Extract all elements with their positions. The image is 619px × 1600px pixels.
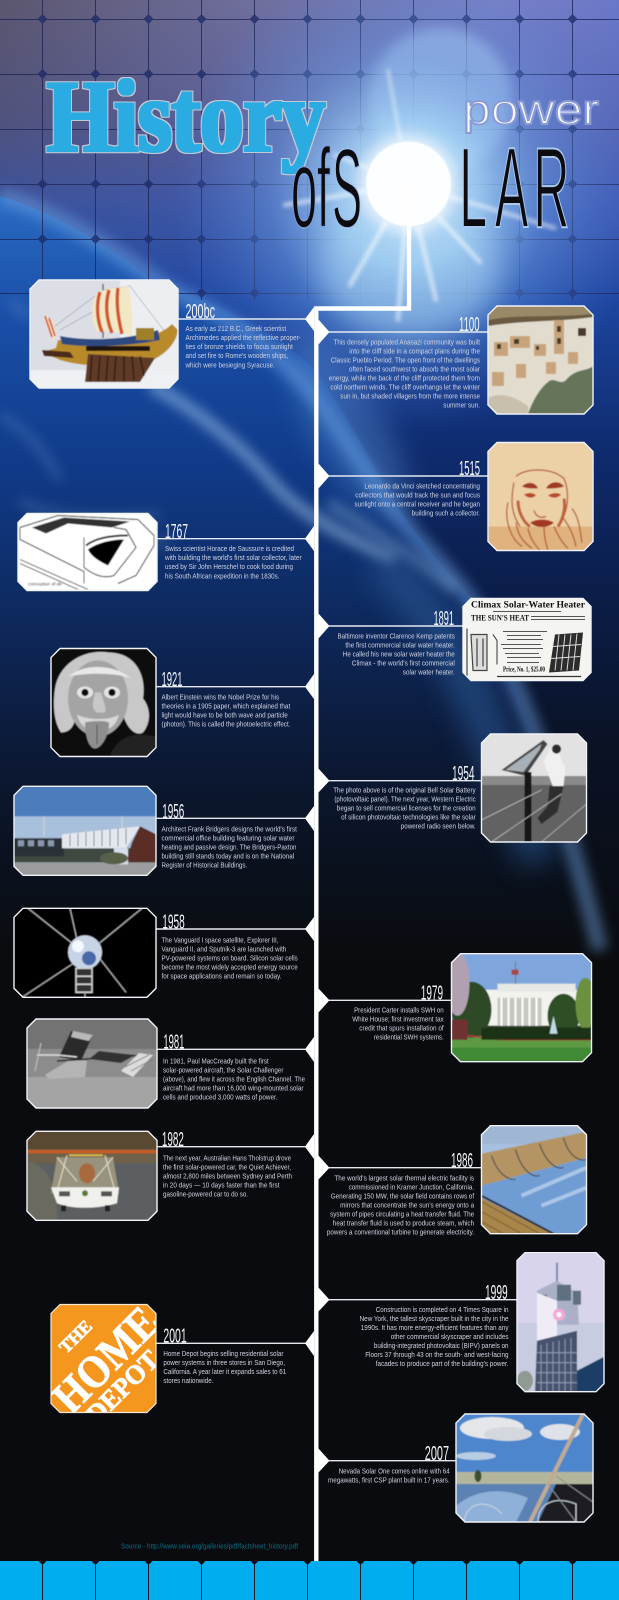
entry: 1986: 1986	[451, 1149, 473, 1172]
background grid of solar panel cells	[0, 0, 619, 300]
description: building such a collector.	[412, 508, 480, 517]
description	[185, 324, 301, 369]
description: powers a conventional turbine to generate electricity.	[327, 1227, 474, 1236]
description: ties of bronze shields to focus sunlight	[186, 342, 294, 351]
description: used by Sir John Herschel to cook food during	[165, 562, 293, 571]
description: As early as 212 B.C., Greek scientist	[186, 324, 287, 333]
description: Register of Historical Buildings.	[162, 861, 247, 870]
title: History of Solar power: S	[332, 126, 362, 251]
description: Architect Frank Bridgers designs the world's first	[162, 825, 298, 834]
description: Albert Einstein wins the Nobel Prize for his	[162, 692, 279, 701]
description	[328, 1466, 450, 1484]
photo: climax solar water heater ad: Climax Solar-Water Heater	[471, 600, 586, 610]
description: (above), and flew it across the English Channel. The	[163, 1074, 305, 1083]
connector	[318, 768, 481, 793]
description: into the cliff side in a compact plans during the	[349, 347, 480, 356]
description	[352, 1006, 444, 1042]
title word: power: power	[463, 86, 599, 134]
description: Leonardo da Vinci sketched concentrating	[364, 481, 480, 490]
connector	[318, 1155, 481, 1180]
connector	[318, 988, 451, 1013]
description: credit that spurs installation of	[359, 1024, 444, 1033]
description	[360, 1305, 509, 1368]
description: residential SWH systems.	[374, 1033, 444, 1042]
entry: 1956: 1956	[162, 800, 184, 823]
photo: home depot logo: DEPOT	[80, 1344, 165, 1429]
description	[164, 544, 302, 580]
photo: white house	[446, 952, 596, 1062]
photo: home depot logo: THE	[55, 1316, 96, 1357]
year: 1767	[165, 520, 188, 543]
entry: 1982: 1982	[162, 1128, 184, 1151]
photo: 4 times square	[517, 1253, 604, 1392]
description: become the most widely accepted energy source	[162, 962, 298, 971]
photo: greek ship	[30, 280, 178, 388]
description: The next year, Australian Hans Tholstrup drove	[163, 1154, 291, 1163]
entry: 1958: 1958	[162, 910, 185, 933]
description: cells and produced 3,000 watts of power.	[163, 1092, 278, 1101]
connector	[156, 674, 314, 699]
description: He called his new solar water heater the	[343, 650, 455, 659]
title word: LAR: LAR	[459, 123, 569, 252]
description: This densely populated Anasazi community was built	[334, 338, 481, 347]
title: History of Solar power: of	[291, 126, 330, 251]
connector	[318, 1287, 517, 1312]
description: The photo above is of the original Bell Solar Battery	[333, 786, 476, 795]
entry: 1954	[318, 734, 586, 842]
description: the first commercial solar water heater.	[345, 641, 455, 650]
description	[163, 1154, 292, 1199]
description: Vanguard II, and Sputnik-3 are launched with	[162, 944, 286, 953]
description: 1990s. It has more energy-efficient features than any	[361, 1323, 509, 1332]
description: sunlight onto a central receiver and he began	[354, 499, 480, 508]
photo: solar collector sketch	[18, 514, 157, 590]
entry: 1981: 1981	[163, 1031, 184, 1054]
entry: 1100: 1100	[459, 313, 480, 336]
entry: 1979	[318, 952, 596, 1062]
entry: 1767	[18, 514, 314, 590]
entry: 1986	[318, 1126, 586, 1236]
description: cold northern winds. The cliff overhangs let the winter	[330, 383, 480, 392]
description: Nevada Solar One comes online with 64	[339, 1466, 450, 1475]
entry: 1515	[318, 442, 593, 550]
description	[329, 338, 481, 410]
entry: 2007	[318, 1414, 593, 1522]
photo: cliff dwellings	[488, 306, 593, 414]
photo: bell solar battery	[482, 734, 586, 842]
photo: climax solar water heater ad: THE SUN'S HEAT	[471, 614, 530, 622]
description	[162, 935, 298, 980]
description: Archimedes applied the reflective proper-	[186, 333, 301, 342]
description: building still stands today and is on the National	[162, 852, 294, 861]
photo: home depot logo	[50, 1304, 157, 1414]
description: summer sun.	[443, 401, 480, 410]
photo: einstein	[51, 648, 156, 756]
title: History of Solar power	[47, 59, 599, 252]
description: The world's largest solar thermal electric facility is	[334, 1173, 474, 1182]
photo: vanguard satellite	[14, 908, 156, 997]
description: California. A year later it expands sales to 61	[163, 1367, 286, 1376]
connector	[318, 319, 488, 345]
photo: kramer junction mirrors	[482, 1126, 586, 1234]
description: his South African expedition in the 1830s.	[165, 571, 280, 580]
photo: climax solar water heater ad	[463, 598, 591, 680]
entry: 1979: 1979	[421, 982, 443, 1005]
entry: 2001	[50, 1304, 314, 1414]
connector	[318, 463, 488, 489]
description: for space applications and remain so today.	[162, 971, 282, 980]
description: President Carter installs SWH on	[354, 1006, 444, 1015]
description: New York, the tallest skyscraper built in the city in the	[360, 1314, 508, 1323]
description: Classic Pueblo Period. The open front of the dwellings	[331, 356, 480, 365]
timeline spine	[316, 184, 409, 1562]
description: power systems in three stores in San Diego,	[163, 1358, 285, 1367]
bottom blue solar cell band	[0, 1561, 619, 1600]
photo: bridgers paxton building	[14, 786, 156, 875]
description: energy, while the back of the cliff protected them from	[329, 374, 480, 383]
entry: 1982	[27, 1128, 314, 1220]
description: Generating 150 MW, the solar field contains rows of	[331, 1191, 475, 1200]
year: 2001	[163, 1325, 187, 1348]
description: Swiss scientist Horace de Saussure is credited	[165, 544, 294, 553]
description: megawatts, first CSP plant built in 17 years.	[328, 1475, 450, 1484]
description: often faced southwest to absorb the most solar	[349, 365, 480, 374]
photo: solar challenger aircraft	[27, 1019, 157, 1108]
connector	[318, 613, 463, 639]
description: sun in, but shaded villagers from the more intense	[340, 392, 480, 401]
entry: 1999: 1999	[485, 1281, 508, 1304]
description: solar water heater.	[403, 668, 455, 677]
description: (photovoltaic panel). The next year, Western Electric	[334, 795, 476, 804]
entry: 1891: 1891	[434, 607, 454, 630]
entry: 1999	[318, 1253, 604, 1392]
entry: 1515: 1515	[459, 457, 480, 480]
connector	[156, 917, 314, 941]
description: Floors 37 through 43 on the south- and west-facing	[365, 1350, 508, 1359]
entry: 1891	[318, 598, 591, 680]
description: the first solar-powered car, the Quiet Achiever,	[163, 1163, 291, 1172]
description	[333, 786, 476, 831]
description: heating and passive design. The Bridgers-Paxton	[162, 843, 296, 852]
entry: 1921	[51, 648, 314, 756]
description	[354, 481, 480, 517]
connector	[156, 1134, 314, 1159]
description: commercial office building featuring solar water	[162, 834, 295, 843]
description: almost 2,800 miles between Sydney and Perth	[163, 1172, 292, 1181]
description: commissioned in Kramer Junction, California.	[349, 1182, 474, 1191]
connector	[156, 806, 314, 831]
description: powered radio seen below.	[401, 822, 476, 831]
connector	[156, 1331, 314, 1356]
description: The Vanguard I space satellite, Explorer III,	[162, 935, 278, 944]
description: and set fire to Rome's wooden ships,	[186, 351, 288, 360]
photo: climax solar water heater ad: Price, No. 1, $25.00	[503, 666, 545, 674]
description: collectors that would track the sun and focus	[355, 490, 480, 499]
entry: 1954: 1954	[452, 762, 474, 785]
description	[338, 632, 455, 677]
description: other commercial skyscraper and includes	[391, 1332, 509, 1341]
description: heat transfer fluid is used to produce steam, which	[333, 1218, 474, 1227]
photo: solar collector sketch: conception of de	[28, 582, 62, 586]
description: of silicon photovoltaic technologies like the solar	[341, 813, 476, 822]
icon: sun with rays	[173, 0, 619, 430]
entry: 1981	[27, 1019, 314, 1108]
description	[163, 1349, 286, 1385]
description: system of pipes circulating a heat transfer fluid. The	[330, 1209, 474, 1218]
entry: 200bc	[30, 280, 314, 388]
description: PV-powered systems on board. Silicon solar cells	[162, 953, 298, 962]
description: (photon). This is called the photoelectric effect.	[162, 719, 290, 728]
description: Construction is completed on 4 Times Square in	[376, 1305, 508, 1314]
photo: home depot logo: HOME	[42, 1296, 169, 1423]
photo: quiet achiever solar car	[27, 1131, 157, 1220]
description: began to sell commercial licenses for the creation	[337, 804, 476, 813]
description: facades to produce part of the building's power.	[376, 1359, 508, 1368]
description	[163, 1056, 305, 1101]
description: with building the world's first solar collector, later	[164, 553, 302, 562]
description: Home Depot begins selling residential solar	[163, 1349, 284, 1358]
photo: nevada solar one	[456, 1414, 593, 1522]
description: gasoline-powered car to do so.	[163, 1190, 248, 1199]
description: stores nationwide.	[163, 1376, 213, 1385]
entry: 1956	[14, 786, 314, 875]
entry: 1100	[318, 306, 593, 414]
description: light would have to be both wave and particle	[162, 710, 288, 719]
description: theories in a 1905 paper, which explained that	[162, 701, 291, 710]
description	[327, 1173, 475, 1236]
description	[162, 692, 291, 728]
entry: 1921: 1921	[162, 668, 182, 691]
description: Baltimore inventor Clarence Kemp patents	[338, 632, 455, 641]
description: in 20 days — 10 days faster than the first	[163, 1181, 280, 1190]
description: mirrors that concentrate the sun's energy onto a	[340, 1200, 475, 1209]
year: 2007	[425, 1442, 449, 1465]
description: White House; first investment tax	[352, 1015, 444, 1024]
description	[162, 825, 298, 870]
title word: History: History	[47, 59, 325, 174]
connector	[157, 526, 314, 551]
description: aircraft had more than 16,000 wing-mounted solar	[163, 1083, 304, 1092]
description: solar-powered aircraft, the Solar Challenger	[163, 1065, 284, 1074]
description: which were besieging Syracuse.	[185, 360, 275, 369]
description: building-integrated photovoltaic (BIPV) panels on	[374, 1341, 509, 1350]
year: 200bc	[186, 300, 215, 323]
entry: 1958	[14, 908, 314, 997]
source credit: Source - http://www.seia.org/galleries/pdf/factsheet_history.pdf	[121, 1542, 299, 1550]
connector	[156, 1037, 314, 1062]
connector	[178, 307, 314, 331]
connector	[318, 1448, 456, 1473]
description: In 1981, Paul MacCready built the first	[163, 1056, 270, 1065]
photo: leonardo self portrait	[488, 442, 593, 550]
description: Climax - the world's first commercial	[352, 659, 455, 668]
